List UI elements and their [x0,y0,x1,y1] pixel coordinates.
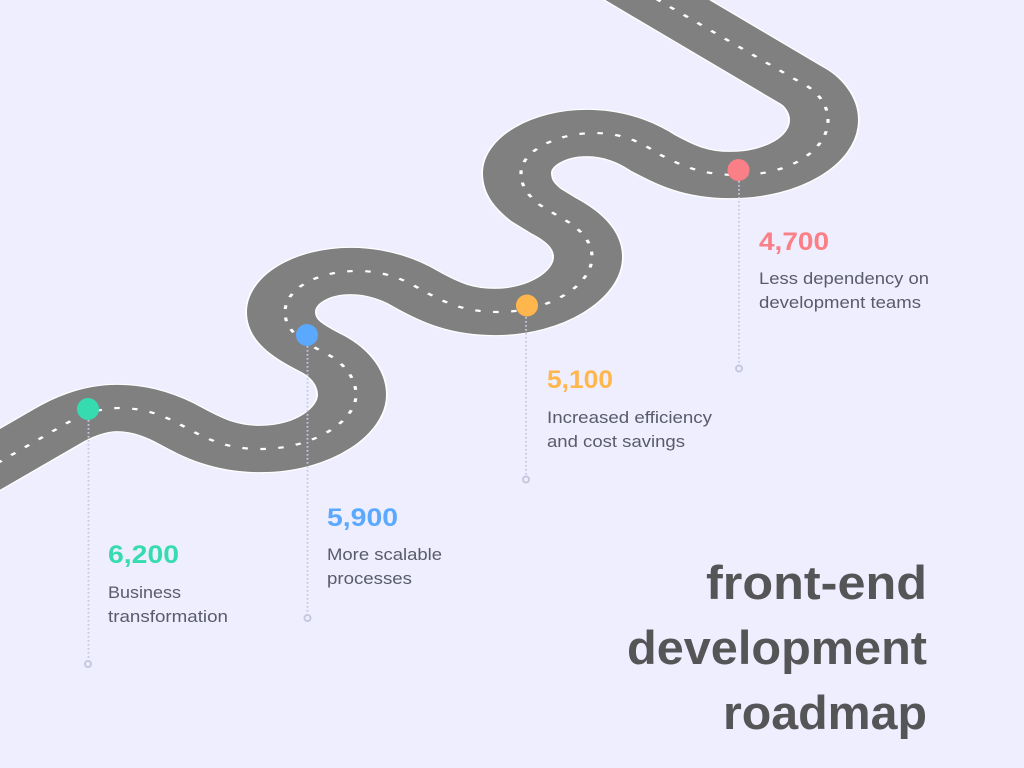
label 4: Less dependency on [759,269,929,288]
milestone 1: 6,200 [77,398,228,667]
label 4: development teams [759,293,921,312]
label 4 [759,269,929,312]
value 4: 4,700 [759,228,829,256]
title: front-end [706,556,927,609]
marker 4 [728,159,750,181]
value 2: 5,900 [327,504,398,532]
label 3: and cost savings [547,432,685,451]
leader line 1 [85,420,91,667]
label 1: transformation [108,607,228,626]
title [627,556,927,739]
winding road [0,0,828,479]
marker 2 [296,324,318,346]
label 1 [108,583,228,626]
marker 1 [77,398,99,420]
label 3 [547,408,713,451]
label 2 [327,545,442,588]
milestone 4: 4,700 [728,159,929,372]
leader line 3 [523,317,529,482]
label 3: Increased efficiency [547,408,713,427]
milestone 3: 5,100 [516,294,713,482]
label 1: Business [108,583,181,602]
value 3: 5,100 [547,366,613,394]
title: roadmap [723,686,927,739]
leader line 2 [304,346,310,621]
value 1: 6,200 [108,541,179,569]
title: development [627,621,927,674]
leader line 4 [736,181,742,372]
milestone 2: 5,900 [296,324,442,621]
marker 3 [516,294,538,316]
label 2: processes [327,569,412,588]
label 2: More scalable [327,545,442,564]
